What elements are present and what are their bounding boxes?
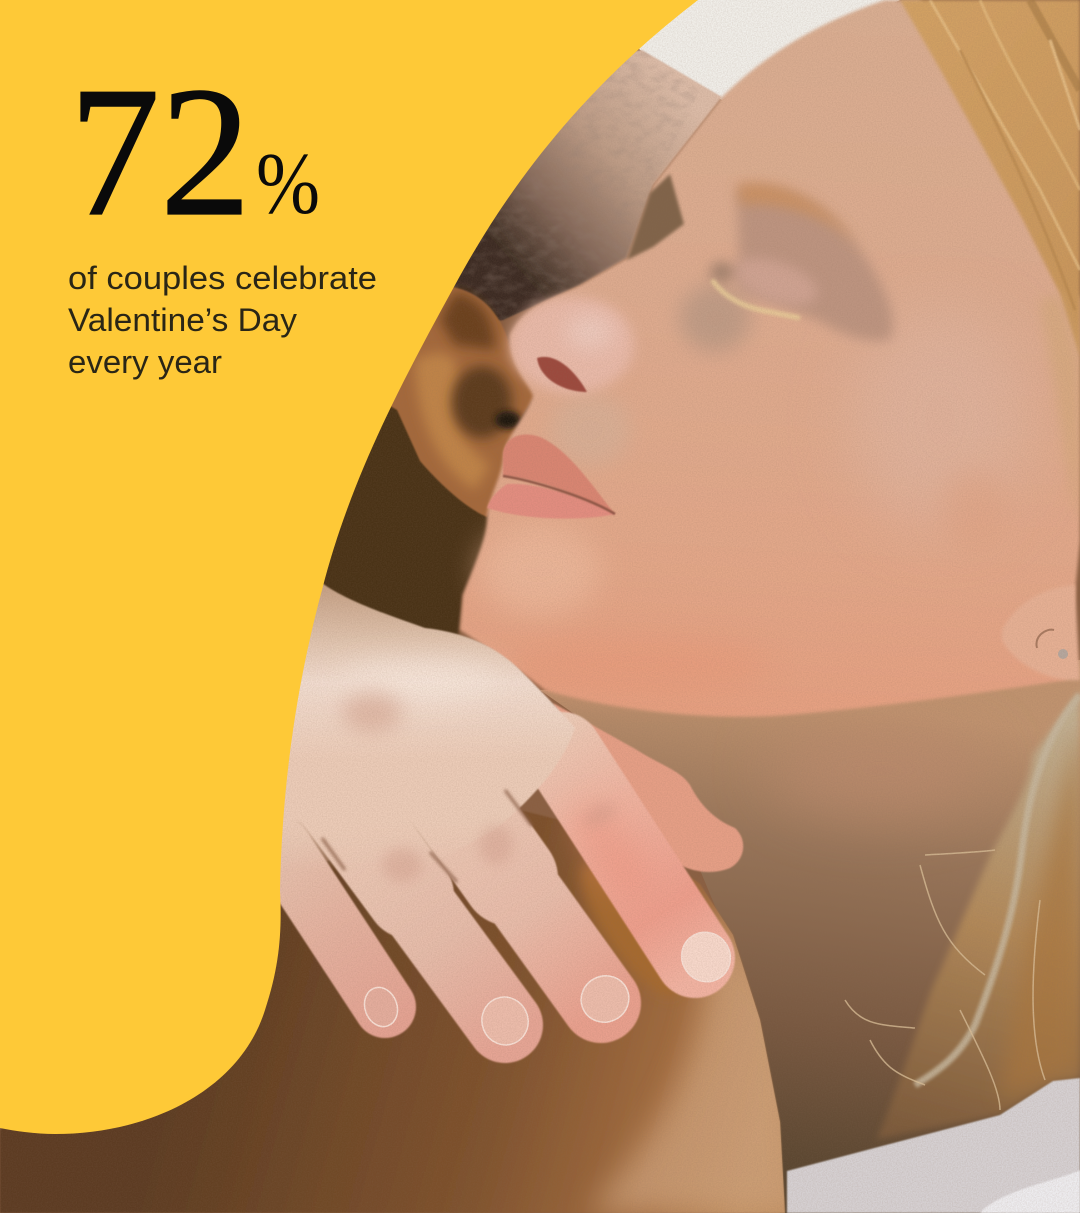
photo: hand highlights <box>340 662 500 698</box>
photo: hand on shoulder <box>272 583 743 1025</box>
photo: warm shadow under fingers <box>564 851 696 1009</box>
photo: fingernails <box>359 923 740 1051</box>
photo: eyelashes <box>712 280 800 318</box>
photo: man's stubbled head <box>430 50 722 330</box>
statistic number: 72 <box>69 49 251 255</box>
photo: man's dark neck <box>300 380 500 640</box>
yellow curved panel <box>0 0 698 1134</box>
photo: knuckle creases <box>382 797 621 882</box>
photo: bright sky background <box>600 0 900 100</box>
photo: warm neck highlight <box>770 725 990 815</box>
statistic description: Valentine’s Day <box>68 302 297 338</box>
photo: woman's neck <box>540 660 1080 1213</box>
photo: thumb <box>553 703 743 872</box>
photo: ring finger <box>340 800 505 1025</box>
photo: index finger <box>562 752 695 958</box>
statistic description <box>68 260 377 380</box>
statistic description: every year <box>68 344 222 380</box>
photo: cheek tones <box>850 310 1030 530</box>
photo: white shirt <box>787 1078 1080 1213</box>
percent sign: % <box>256 136 320 233</box>
photo: woman's face <box>460 0 1080 717</box>
photo: philtrum <box>550 394 630 466</box>
photo: hair lower <box>845 690 1080 1139</box>
photo: back of hand <box>272 583 575 890</box>
photo: shoulder <box>0 800 785 1213</box>
photo: finger separation lines <box>322 790 532 882</box>
photo: man's ear <box>380 280 535 517</box>
photo: hair upper <box>900 0 1080 520</box>
photo: nose <box>510 297 634 393</box>
photo: dark nose-bridge patch <box>627 174 684 260</box>
photo: lit shoulder rim <box>590 900 800 1213</box>
photo: middle finger <box>430 765 601 1003</box>
big statistic: 72% <box>69 49 320 255</box>
photo: little finger <box>282 850 385 1007</box>
photo: lips <box>487 434 615 519</box>
statistic description: of couples celebrate <box>68 260 377 296</box>
photo: woman's ear and earring <box>1002 585 1080 680</box>
photo: closed eye socket <box>679 183 893 352</box>
